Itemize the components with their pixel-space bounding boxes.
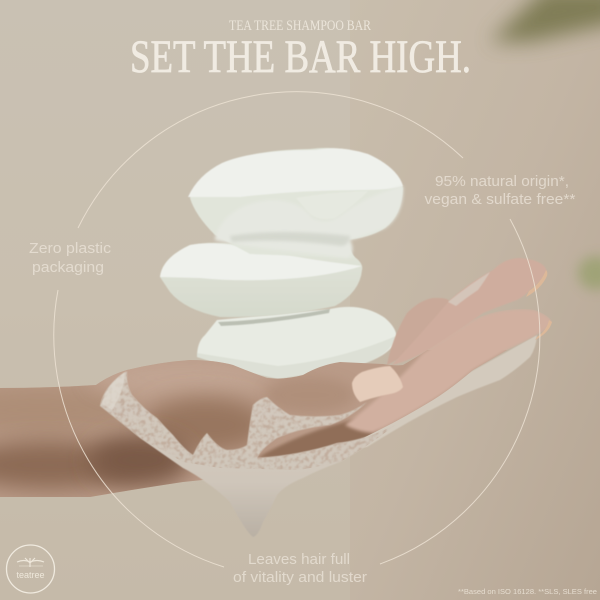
palm, thumb, lower finger and arm	[0, 309, 560, 500]
hand and arm	[0, 258, 560, 537]
foam under lower finger	[345, 335, 537, 450]
claim: natural origin	[424, 173, 576, 208]
upper finger	[392, 258, 547, 365]
claim: vitality: Leaves hair full	[248, 551, 350, 568]
claim: zero plastic: Zero plastic	[29, 240, 112, 257]
foam on upper finger edge	[448, 272, 490, 306]
claim: natural origin: vegan & sulfate free**	[424, 191, 576, 208]
blurred plant, top right	[490, 0, 600, 42]
claim: vitality: of vitality and luster	[233, 569, 367, 586]
footnote: **Based on ISO 16128. **SLS, SLES free	[458, 587, 597, 596]
icon: tree	[17, 558, 44, 567]
thumbnail	[352, 366, 403, 402]
back finger	[387, 298, 450, 365]
logo: tea tree badge	[6, 545, 54, 593]
bottom soap bar	[197, 307, 397, 379]
claim: zero plastic	[29, 240, 112, 276]
title: SET THE BAR HIGH.	[130, 31, 471, 83]
logo: tea tree badge: teatree	[16, 570, 45, 580]
middle soap bar	[160, 243, 362, 317]
top soap bar	[188, 148, 403, 258]
nail: upper finger	[526, 270, 547, 297]
blurred plant, right edge	[578, 256, 600, 290]
nail: lower finger	[535, 320, 552, 340]
claim: natural origin: 95% natural origin*,	[435, 173, 569, 190]
subtitle: TEA TREE SHAMPOO BAR	[229, 18, 371, 34]
foam and drip	[95, 365, 400, 537]
decorative ring	[54, 92, 540, 567]
claim: zero plastic: packaging	[32, 259, 104, 276]
claim: vitality	[233, 551, 367, 586]
soap stack	[160, 148, 403, 379]
lather between bars	[215, 186, 403, 258]
